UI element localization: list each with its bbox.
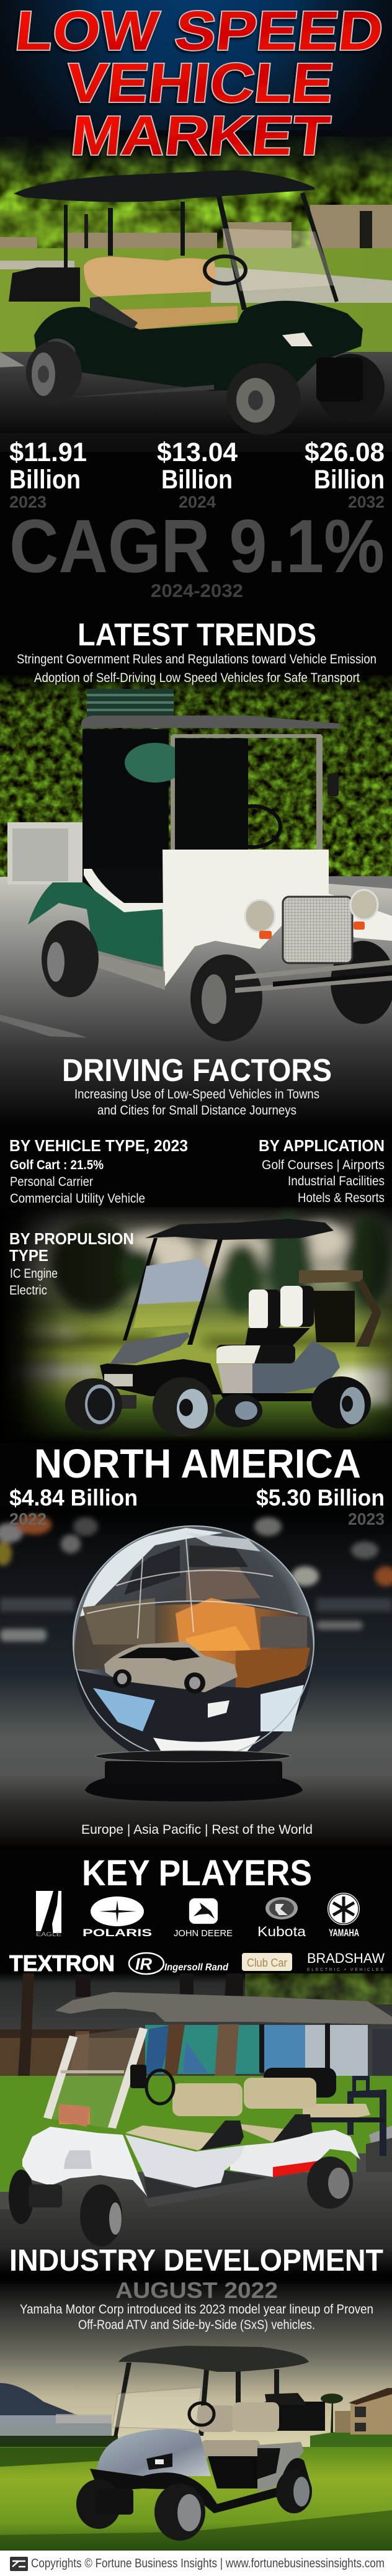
stat: north america 2022: $4.84 Billion (9, 1485, 138, 1510)
segment: by vehicle type (9, 1136, 188, 1206)
heading: key players: KEY PLAYERS (82, 1853, 312, 1893)
footer (0, 2551, 392, 2576)
text: trend two: Adoption of Self-Driving Low Speed Vehicles for Safe Transport (34, 671, 360, 685)
icon: Fortune Business Insights logo (10, 2557, 28, 2571)
white and green cart (7, 716, 392, 1041)
stat 2024: 2024 (179, 493, 216, 511)
title (12, 0, 386, 166)
logo: Kubota: Kubota (257, 1924, 306, 1939)
logo: Polaris: POLARIS (82, 1927, 152, 1939)
logo row: key players (9, 1891, 385, 1976)
stat 2032: $26.08 (305, 438, 385, 467)
logo: Kubota (257, 1897, 306, 1939)
segment: by propulsion type: TYPE (9, 1246, 48, 1265)
heading: driving factors: DRIVING FACTORS (62, 1052, 332, 1088)
heading: latest trends: LATEST TRENDS (78, 617, 316, 652)
panel: north america globe (0, 1508, 392, 1849)
stat 2023: $11.91 (9, 438, 87, 467)
logo: Club Car: Club Car (247, 1957, 287, 1969)
stat 2024: $13.04 (157, 438, 238, 467)
silver golf cart (76, 2346, 325, 2541)
segment: by vehicle type: Golf Cart : 21.5% (10, 1158, 104, 1172)
logo: Textron: TEXTRON (9, 1950, 115, 1976)
heading: north america: NORTH AMERICA (34, 1440, 361, 1486)
segment: by propulsion type: BY PROPULSION (9, 1229, 134, 1248)
heading: industry development: INDUSTRY DEVELOPMENT (9, 2244, 383, 2278)
stat: north america 2023 (256, 1485, 385, 1528)
date: august 2022: AUGUST 2022 (115, 2278, 278, 2303)
CAGR period: 2024-2032 (151, 581, 243, 601)
black golf cart (65, 1219, 381, 1437)
title: LOW SPEED (12, 0, 386, 61)
segment: by application: BY APPLICATION (259, 1136, 385, 1155)
stat: north america 2023: $5.30 Billion (256, 1485, 385, 1510)
logo: Ingersoll Rand (129, 1953, 229, 1974)
logo: Bradshaw: BRADSHAW (307, 1950, 385, 1966)
segment: by propulsion type: IC Engine (10, 1267, 58, 1281)
glass globe (73, 1526, 314, 1759)
segment: by application: Industrial Facilities (288, 1174, 385, 1188)
title: MARKET (68, 104, 332, 166)
stat 2023 (9, 438, 87, 511)
stat: north america 2023: 2023 (348, 1510, 385, 1528)
panel: segment photo of black golf cart (0, 1207, 392, 1443)
panel: white six seat cart photo (0, 1972, 392, 2296)
text: other regions: Europe | Asia Pacific | Rest of the World (81, 1823, 313, 1837)
logo: Bradshaw: ELECTRIC • VEHICLES (307, 1968, 383, 1972)
stat 2032 (305, 438, 385, 511)
stat 2024 (157, 438, 238, 511)
segment: by application (259, 1136, 385, 1205)
stat 2023: 2023 (9, 493, 47, 511)
logo: Ingersoll Rand: Ingersoll Rand (164, 1962, 229, 1973)
segment: by application: Golf Courses | Airports (262, 1158, 385, 1172)
text: driving factor description: Increasing Use of Low-Speed Vehicles in Towns (74, 1087, 319, 1102)
golf cart (9, 170, 385, 435)
panel: latest trends photo of white and green cart (0, 673, 392, 1123)
globe stand (85, 1751, 303, 1802)
logo: John Deere: JOHN DEERE (174, 1928, 233, 1939)
logo: Club Car (242, 1953, 292, 1971)
stat 2032: 2032 (348, 493, 385, 511)
logo: Polaris (82, 1896, 152, 1939)
segment: by propulsion type (9, 1229, 134, 1298)
logo: Ingersoll Rand: IR (135, 1955, 153, 1973)
logo: Eagle: EAGLE (36, 1931, 61, 1937)
white six seat cart (9, 1992, 392, 2246)
segment: by vehicle type: BY VEHICLE TYPE, 2023 (9, 1136, 188, 1155)
logo: John Deere (174, 1898, 233, 1939)
segment: by vehicle type: Personal Carrier (10, 1175, 93, 1189)
logo: Eagle (36, 1891, 61, 1937)
text: driving factor description (74, 1087, 319, 1118)
villa (321, 2388, 392, 2435)
stat: north america 2022: 2022 (9, 1510, 47, 1528)
panel: silver golf cart on golf course (0, 2284, 392, 2552)
segment: by propulsion type: Electric (9, 1283, 47, 1298)
stat: north america 2022 (9, 1485, 138, 1528)
text: development detail (20, 2302, 373, 2332)
hero panel: title and golf cart (0, 0, 392, 439)
car inside globe (104, 1641, 238, 1694)
text: development detail: Off-Road ATV and Side-by-Side (SxS) vehicles. (78, 2318, 315, 2332)
statistics panel (0, 433, 392, 601)
stat 2024: Billion (161, 465, 233, 495)
title: VEHICLE (63, 52, 336, 114)
stat 2023: Billion (9, 465, 81, 495)
text: driving factor description: and Cities for Small Distance Journeys (97, 1103, 296, 1118)
segment: by vehicle type: Commercial Utility Vehicle (10, 1192, 145, 1206)
logo: Yamaha (327, 1893, 360, 1939)
logo: Yamaha: YAMAHA (329, 1927, 359, 1939)
